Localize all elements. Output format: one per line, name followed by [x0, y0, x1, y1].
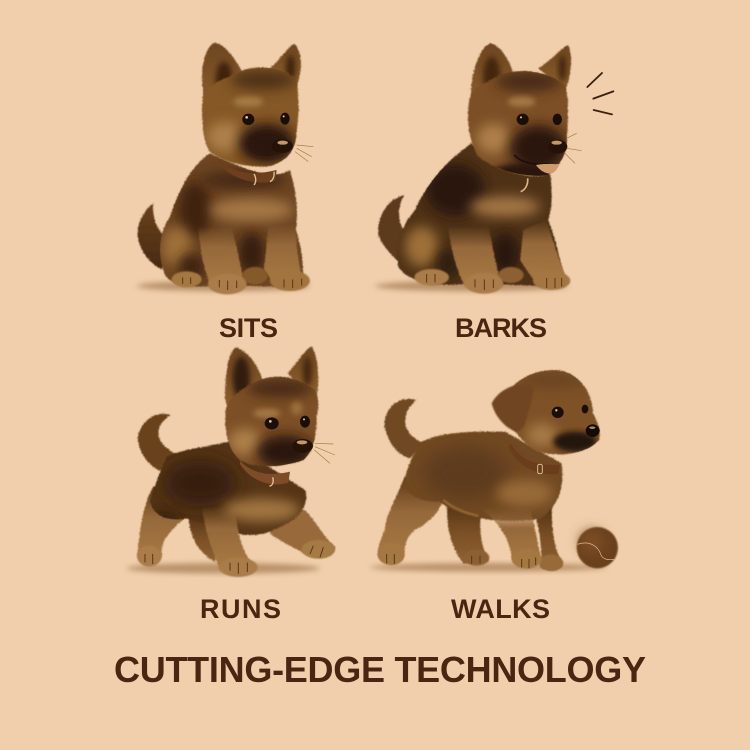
- ears: [202, 43, 301, 110]
- extended front leg: [270, 510, 335, 559]
- label: barks: BARKS: [455, 313, 547, 343]
- collar: [240, 461, 290, 484]
- collar ring: [269, 477, 273, 486]
- ears: [471, 43, 571, 110]
- tongue: [536, 164, 559, 174]
- collar ring: [521, 178, 528, 192]
- head: [225, 377, 318, 468]
- front leg: [137, 507, 323, 577]
- label: runs: RUNS: [200, 594, 281, 624]
- tail: [384, 399, 425, 458]
- bark lines: [587, 73, 613, 114]
- far hind leg: [188, 513, 223, 562]
- body: [397, 143, 565, 287]
- label: sits: SITS: [219, 313, 278, 343]
- ground shadow: [137, 281, 310, 291]
- head: [505, 370, 600, 454]
- head: [202, 68, 299, 167]
- puppy: barks: [375, 43, 613, 294]
- body: [404, 431, 562, 521]
- title: CUTTING-EDGE TECHNOLOGY: [114, 649, 646, 690]
- puppy: walks: [370, 370, 618, 572]
- puppy: sits: [137, 43, 313, 294]
- whiskers: [565, 133, 582, 163]
- floppy ear: [492, 384, 533, 432]
- front legs and paws: [172, 223, 310, 294]
- whiskers: [295, 145, 313, 162]
- tail: [378, 195, 408, 262]
- whiskers: [314, 443, 335, 463]
- ears: [225, 347, 318, 415]
- rear leg: [378, 477, 443, 565]
- puppy: runs: [127, 347, 335, 577]
- body: [143, 442, 306, 535]
- label: walks: WALKS: [451, 594, 550, 624]
- ground shadow: [127, 563, 320, 574]
- head: [468, 71, 568, 183]
- tail: [138, 414, 178, 472]
- tennis ball: [577, 527, 618, 568]
- collar: [508, 443, 560, 474]
- front legs and paws: [414, 220, 570, 294]
- collar: [218, 158, 277, 183]
- ground shadow: [370, 563, 607, 572]
- body: [160, 153, 303, 287]
- collar ring: [254, 172, 274, 185]
- ground shadow: [375, 281, 568, 291]
- far front leg: [533, 503, 563, 571]
- tail: [138, 203, 173, 269]
- front leg: [378, 507, 542, 569]
- far hind leg: [447, 500, 489, 566]
- rear leg: [137, 487, 190, 565]
